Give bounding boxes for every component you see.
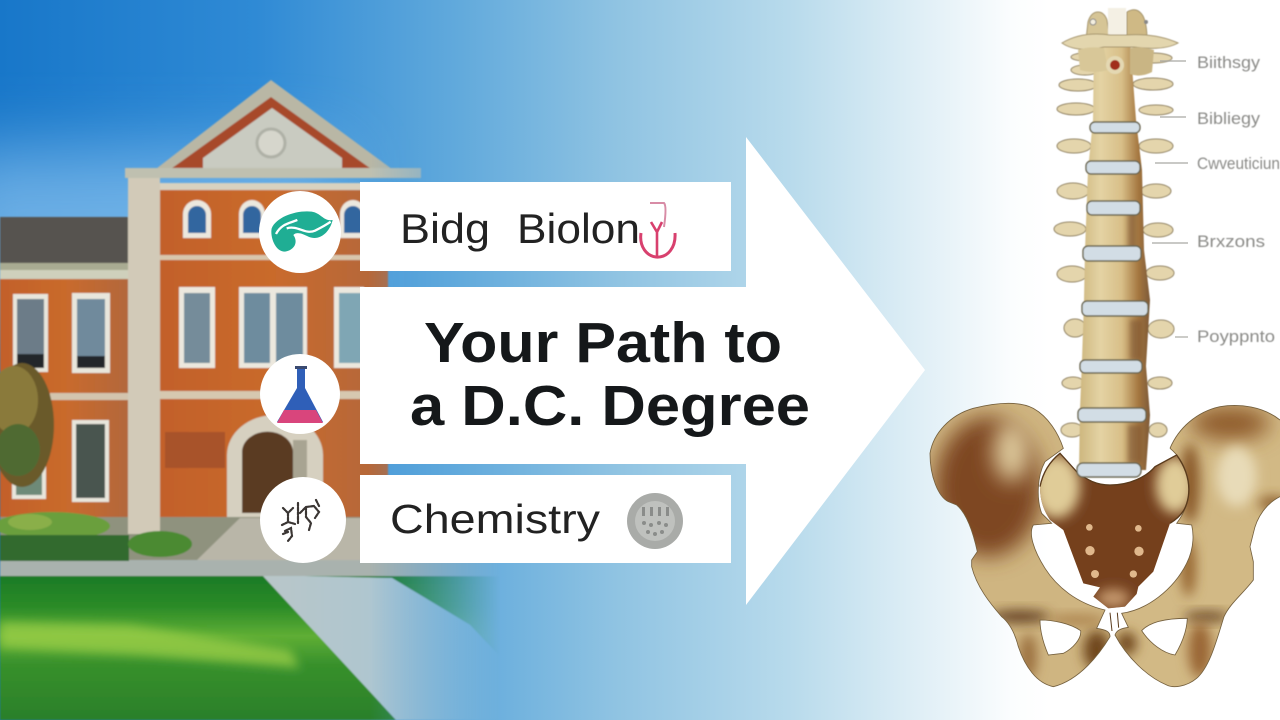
top label panel <box>360 182 731 271</box>
label: biology: Biolon <box>517 205 640 252</box>
column shading <box>1128 210 1142 463</box>
spinal column <box>1079 40 1150 470</box>
tower pier <box>128 172 160 534</box>
entrance steps <box>197 517 360 560</box>
label: biology: Bidg <box>400 205 490 252</box>
pavement <box>0 558 520 576</box>
transverse processes <box>1054 53 1174 437</box>
top vertebrae <box>1062 8 1178 76</box>
sacrum <box>1039 452 1190 608</box>
title: Your Path to <box>424 311 782 375</box>
icon: grey coin <box>627 493 683 549</box>
left hip bone <box>930 402 1110 688</box>
anatomy labels <box>1197 53 1280 346</box>
leader lines <box>1152 61 1188 337</box>
campus building photo <box>0 80 494 720</box>
title: a D.C. Degree <box>410 374 810 438</box>
white arrow <box>360 137 925 605</box>
hedges and tree <box>0 363 192 561</box>
intervertebral discs <box>1077 122 1148 477</box>
gable pediment <box>125 80 421 190</box>
icon: pink anchor <box>641 203 675 257</box>
label: biology <box>400 205 640 252</box>
tower brick wall <box>160 185 388 517</box>
label 1: Biithsgy <box>1197 53 1261 72</box>
icon: flask circle <box>260 354 340 434</box>
tower arched windows <box>183 200 366 238</box>
label 5: Poyppnto <box>1197 327 1275 346</box>
icon: leaf circle <box>259 191 341 273</box>
vertebral foramen <box>1106 56 1124 74</box>
right hip bone <box>1113 390 1280 700</box>
lawn <box>0 575 520 720</box>
pelvis illustration <box>930 402 1280 688</box>
left wing roof <box>0 217 130 280</box>
left wing brick wall <box>0 279 130 517</box>
title <box>410 311 810 438</box>
spine illustration <box>1054 8 1178 477</box>
label 4: Brxzons <box>1197 232 1265 251</box>
foundation <box>0 515 388 560</box>
bottom label panel <box>360 475 731 563</box>
entrance door <box>227 415 323 517</box>
symphysis <box>1110 613 1119 631</box>
tower tall windows <box>179 287 364 368</box>
label 2: Bibliegy <box>1197 109 1261 128</box>
walkway <box>262 575 494 720</box>
arrow shaft and head <box>360 137 925 605</box>
icon: molecule circle <box>260 477 346 563</box>
label: chemistry: Chemistry <box>390 496 601 542</box>
